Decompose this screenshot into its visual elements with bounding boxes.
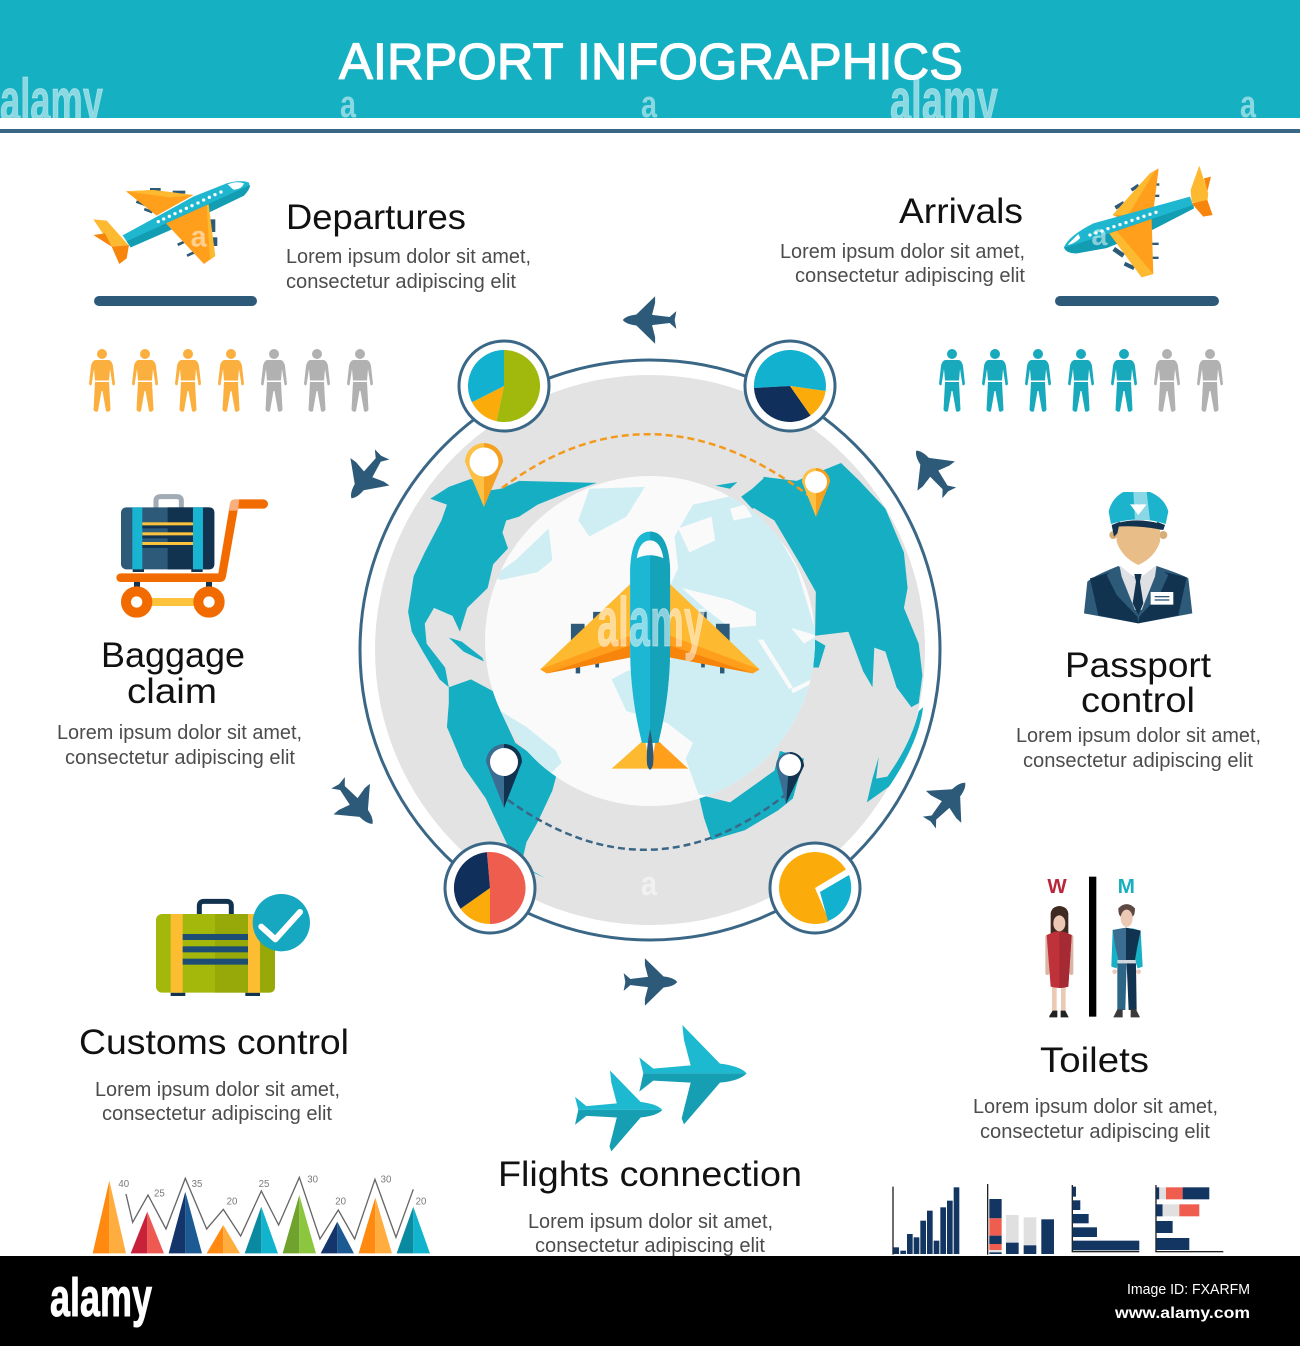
panel: passport control (1016, 492, 1261, 772)
pin: navy africa (776, 752, 804, 804)
watermark over airplane: alamy (597, 583, 705, 661)
outer ring (360, 360, 940, 940)
panel: toilets (973, 875, 1218, 1143)
pie chart top right (745, 341, 835, 431)
title: AIRPORT INFOGRAPHICS (339, 33, 963, 90)
panel: central globe (360, 341, 940, 940)
toilets heading: Toilets (1040, 1041, 1149, 1080)
chart: triangle peaks with zigzag line: 25 (154, 1188, 165, 1199)
toilets text: Lorem ipsum dolor sit amet, (973, 1096, 1218, 1118)
chart: triangle peaks with zigzag line (93, 1174, 430, 1253)
toilets text line 2: consectetur adipiscing elit (980, 1121, 1210, 1143)
pin: orange asia (802, 468, 830, 517)
baggage text line 2: consectetur adipiscing elit (65, 747, 295, 769)
pie chart bottom left (445, 843, 535, 933)
flights text line 2: consectetur adipiscing elit (535, 1235, 765, 1257)
customs heading: Customs control (79, 1023, 349, 1062)
header band (0, 0, 1300, 133)
baggage text: Lorem ipsum dolor sit amet, (57, 722, 302, 744)
chart: triangle peaks with zigzag line: 20 (227, 1197, 237, 1208)
footer bar (0, 1256, 1300, 1346)
chart: triangle peaks with zigzag line: 30 (307, 1174, 318, 1185)
panel: arrivals (780, 166, 1223, 412)
watermarks in header: a (1240, 84, 1257, 126)
inner white circle (485, 476, 815, 806)
gray globe disc (375, 375, 925, 925)
flights text: Lorem ipsum dolor sit amet, (528, 1211, 773, 1233)
central airplane (540, 532, 760, 770)
baggage heading line 2: claim (127, 672, 217, 711)
icon: small plane lower left (320, 768, 391, 839)
icon: suitcase with check (156, 894, 310, 996)
departures runway bar (94, 296, 257, 306)
icon: two connecting planes (575, 1025, 747, 1151)
arrivals runway bar (1055, 296, 1219, 306)
icon: small plane upper right (897, 436, 968, 507)
departures heading: Departures (286, 198, 466, 237)
panel: baggage claim (57, 497, 302, 769)
chart: triangle peaks with zigzag line: 25 (259, 1179, 269, 1190)
pin: navy south america (486, 744, 522, 808)
watermarks in header: a (340, 84, 357, 126)
watermarks in header: a (641, 84, 658, 126)
bar chart 3 (1072, 1185, 1139, 1252)
arrivals text: Lorem ipsum dolor sit amet, (780, 241, 1025, 263)
departures text: Lorem ipsum dolor sit amet, (286, 246, 531, 268)
icon: woman and man restroom sign: M (1118, 875, 1135, 898)
route: orange dashed arc (502, 434, 808, 495)
passport heading line 2: control (1081, 681, 1195, 720)
passport heading: Passport (1065, 646, 1211, 685)
world map continents (408, 463, 923, 878)
departures text line 2: consectetur adipiscing elit (286, 271, 516, 293)
flights heading: Flights connection (498, 1155, 802, 1194)
watermark on globe: a (641, 865, 658, 903)
icon: departing airplane: a (191, 221, 207, 254)
pin: orange north america (465, 443, 503, 507)
panel: departures (89, 181, 531, 412)
departures people pictogram (89, 349, 373, 412)
chart: triangle peaks with zigzag line: 40 (118, 1179, 129, 1190)
route: navy dashed arc (508, 795, 785, 850)
bar chart 4 (1155, 1185, 1223, 1252)
passport text line 2: consectetur adipiscing elit (1023, 750, 1253, 772)
watermarks in header: alamy (0, 67, 103, 134)
footer image id: Image ID: FXARFM (1127, 1282, 1250, 1298)
customs text line 2: consectetur adipiscing elit (102, 1103, 332, 1125)
chart: triangle peaks with zigzag line: 30 (381, 1174, 391, 1185)
bar chart 1 (892, 1187, 959, 1255)
footer url: www.alamy.com (1114, 1305, 1250, 1322)
icon: pilot (1084, 492, 1192, 623)
inner map (493, 487, 817, 798)
customs text: Lorem ipsum dolor sit amet, (95, 1079, 340, 1101)
icon: small plane bottom (624, 958, 677, 1006)
icon: arriving airplane (1064, 166, 1213, 277)
chart: triangle peaks with zigzag line: 35 (192, 1179, 202, 1190)
arrivals text line 2: consectetur adipiscing elit (795, 265, 1025, 287)
passport text: Lorem ipsum dolor sit amet, (1016, 725, 1261, 747)
bar chart 2 (987, 1184, 1054, 1255)
icon: arriving airplane: a (1091, 219, 1108, 252)
watermarks in header (0, 76, 1256, 118)
chart: triangle peaks with zigzag line: 20 (416, 1197, 426, 1208)
icon: small plane lower right (912, 767, 983, 839)
pie chart top left (459, 341, 549, 431)
icon: woman and man restroom sign (1045, 875, 1143, 1017)
arrivals heading: Arrivals (899, 192, 1023, 231)
icon: woman and man restroom sign: W (1047, 875, 1067, 898)
pie chart bottom right (770, 843, 860, 933)
baggage heading: Baggage (101, 636, 245, 675)
icon: baggage cart (116, 497, 268, 613)
icon: small plane upper left (332, 441, 402, 512)
panel: customs control (79, 894, 349, 1125)
chart: triangle peaks with zigzag line: 20 (335, 1197, 346, 1208)
arrivals people pictogram (939, 349, 1223, 412)
watermarks in header: alamy (890, 67, 998, 134)
icon: departing airplane (93, 181, 250, 264)
panel: flights connection (498, 1025, 802, 1257)
chart: four small bar charts (892, 1184, 1223, 1255)
icon: small plane top (623, 296, 676, 344)
footer logo: alamy (50, 1268, 152, 1328)
